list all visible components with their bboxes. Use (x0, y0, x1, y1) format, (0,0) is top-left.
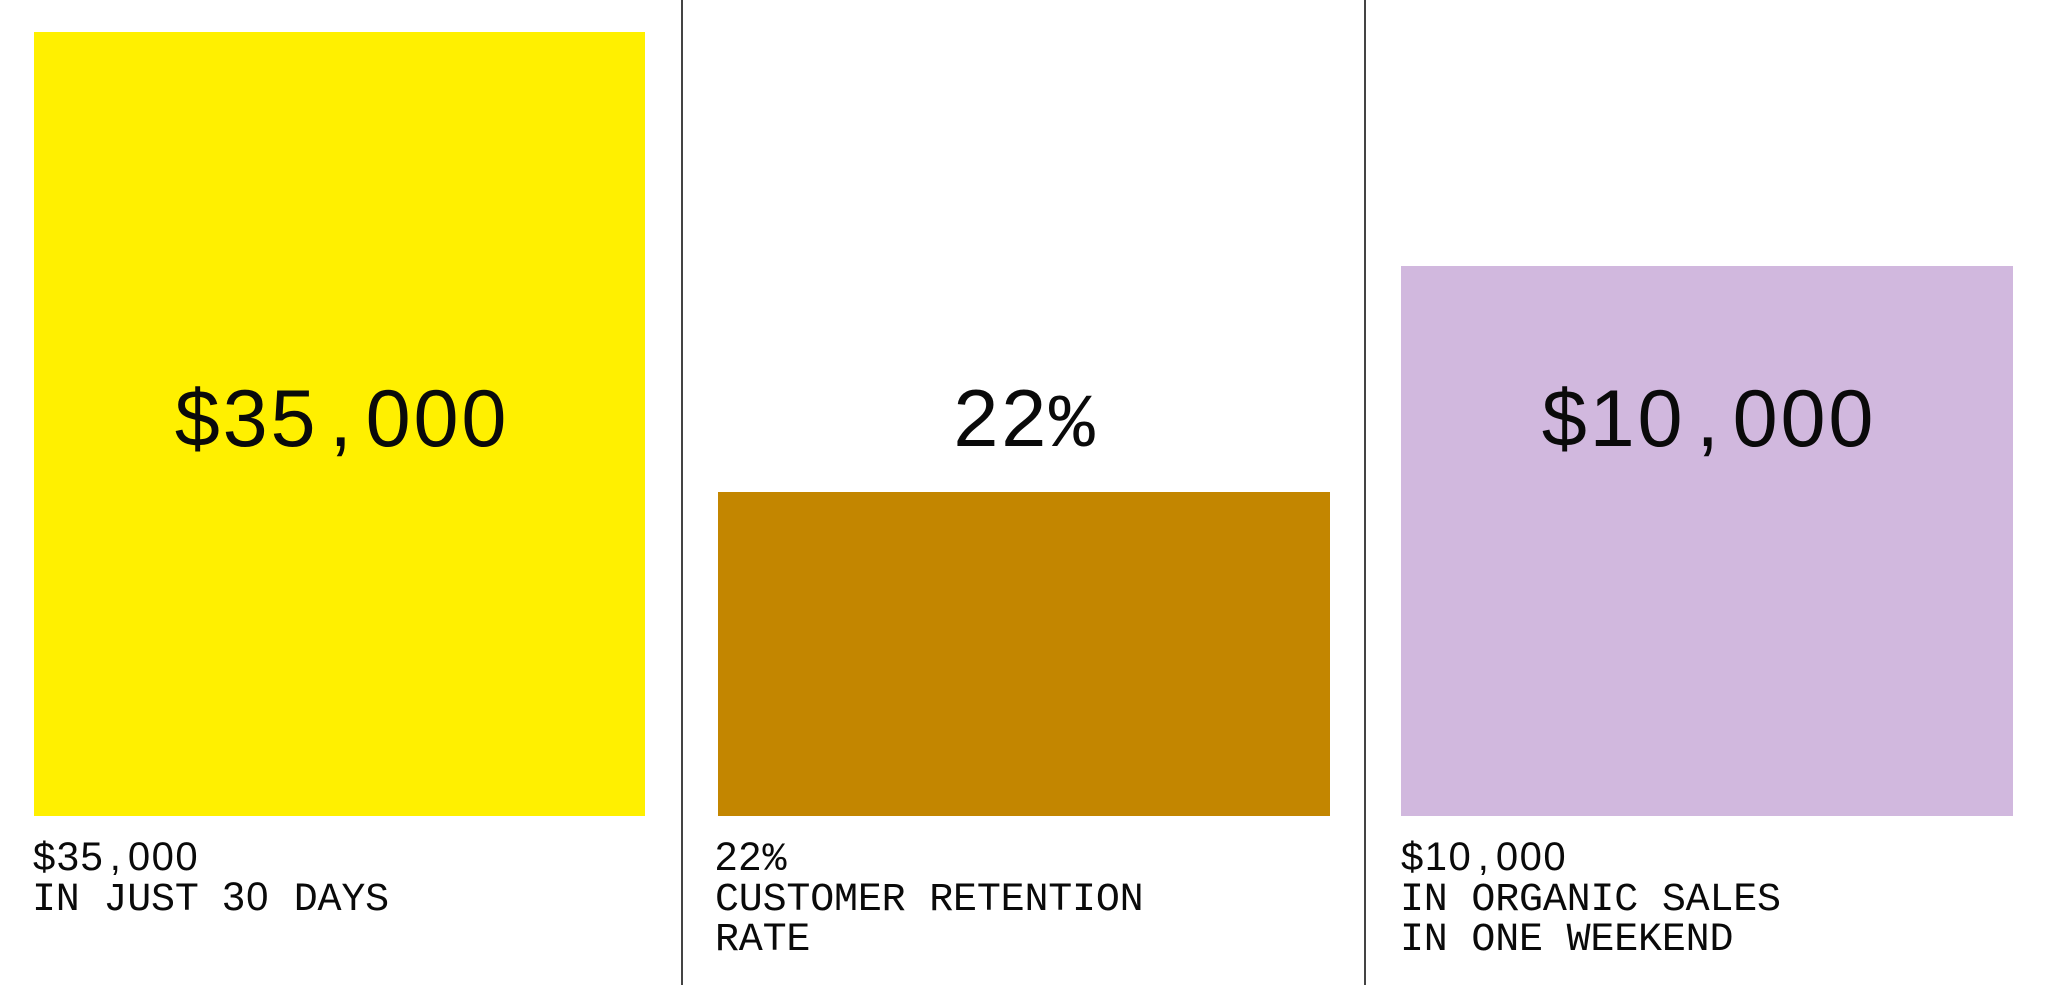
caption: $35,000 in just 30 days: IN JUST 30 DAYS (32, 875, 389, 923)
bar: 22% brown (718, 492, 1330, 816)
bar: $10,000 purple (1401, 266, 2013, 816)
big number: $10,000: $10,000 (1542, 374, 1876, 464)
big number: $35,000: $35,000 (175, 374, 509, 464)
big number: 22%: 22% (953, 374, 1095, 469)
caption: $10,000 in organic sales in one weekend: $10,000 (1401, 835, 1567, 879)
caption: 22% customer retention rate: RATE (715, 918, 810, 963)
caption: 22% customer retention rate: 22% (715, 835, 786, 883)
bar: $35,000 yellow (34, 32, 645, 816)
caption: 22% customer retention rate (715, 835, 1143, 963)
caption: $10,000 in organic sales in one weekend (1400, 835, 1781, 963)
caption: $10,000 in organic sales in one weekend: IN ORGANIC SALES (1400, 878, 1781, 923)
divider right (1364, 0, 1366, 985)
caption: 22% customer retention rate: CUSTOMER RETENTION (715, 878, 1143, 923)
caption: $35,000 in just 30 days: $35,000 (33, 835, 199, 879)
divider left (681, 0, 683, 985)
caption: $10,000 in organic sales in one weekend: IN ONE WEEKEND (1400, 918, 1733, 963)
caption: $35,000 in just 30 days (32, 835, 389, 923)
